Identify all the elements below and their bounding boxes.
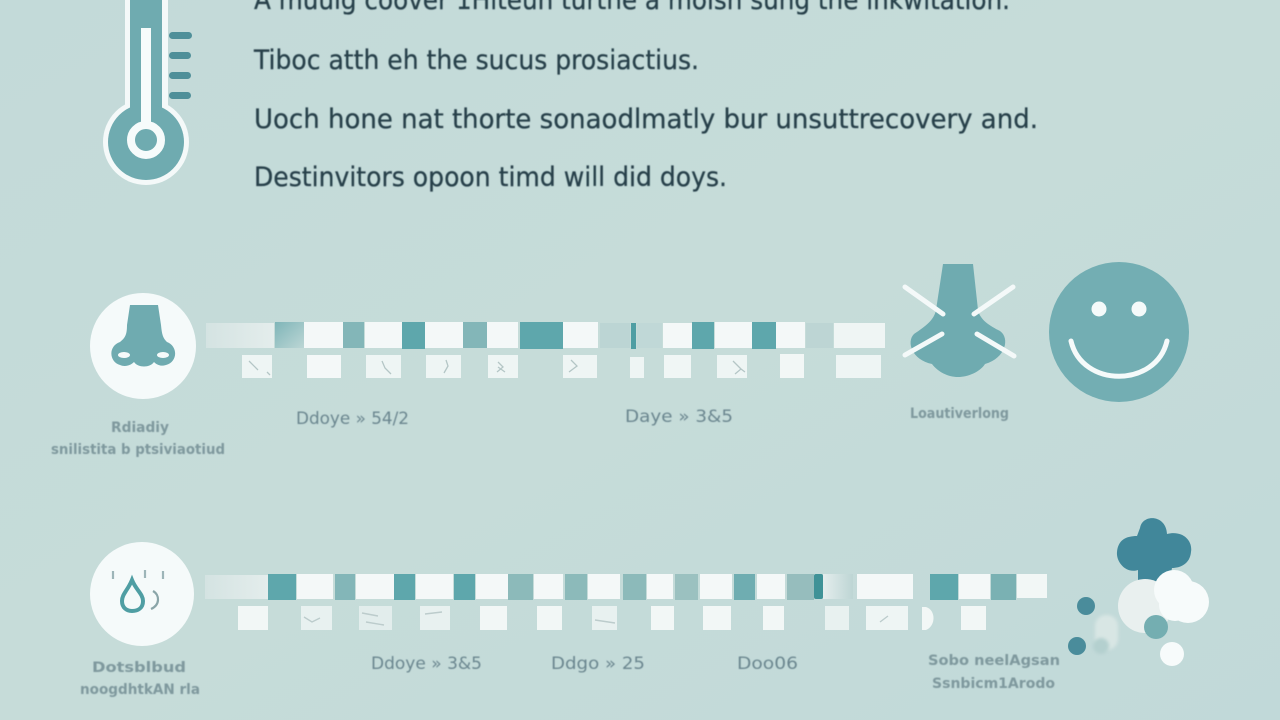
text block: intro lines xyxy=(253,0,1038,193)
label: days lower third: Doo06 xyxy=(737,654,798,674)
timeline tiles: upper xyxy=(242,354,881,378)
label: relief: Loautiverlong xyxy=(910,406,1009,422)
icon: nose with clear lines xyxy=(905,264,1014,377)
timeline bar: upper xyxy=(206,322,885,349)
label: days upper first: Ddoye » 54/2 xyxy=(296,409,409,429)
label: lower right: Ssnbicm1Arodo xyxy=(932,676,1055,692)
icon: water drop in white circle xyxy=(90,542,194,646)
label: upper left: snilistita b ptsiviaotiud xyxy=(51,442,225,458)
label: upper left: Rdiadiy xyxy=(111,420,169,436)
label: lower right xyxy=(928,653,1060,692)
label: days upper second: Daye » 3&5 xyxy=(625,407,733,427)
label: days lower first: Ddoye » 3&5 xyxy=(371,654,482,674)
timeline bar: lower xyxy=(205,574,1047,600)
text block: intro lines: Uoch hone nat thorte sonaodlmatly bur unsuttrecovery and. xyxy=(254,104,1038,135)
label: lower left: noogdhtkAN rla xyxy=(80,682,200,698)
label: lower left: Dotsblbud xyxy=(92,660,186,676)
label: days lower second: Ddgo » 25 xyxy=(551,654,645,674)
label: lower right: Sobo neelAgsan xyxy=(928,653,1060,669)
icon: thermometer xyxy=(103,0,192,185)
icon: smiley xyxy=(1049,262,1189,402)
timeline tiles: lower xyxy=(238,606,986,630)
icon: clouds and dots xyxy=(1068,518,1209,666)
text block: intro lines: Destinvitors opoon timd will did doys. xyxy=(254,162,727,193)
icon: nose in white circle xyxy=(90,293,196,399)
label: upper left xyxy=(51,420,225,458)
label: lower left xyxy=(80,660,200,698)
text block: intro lines: Tiboc atth eh the sucus prosiactius. xyxy=(253,45,699,76)
